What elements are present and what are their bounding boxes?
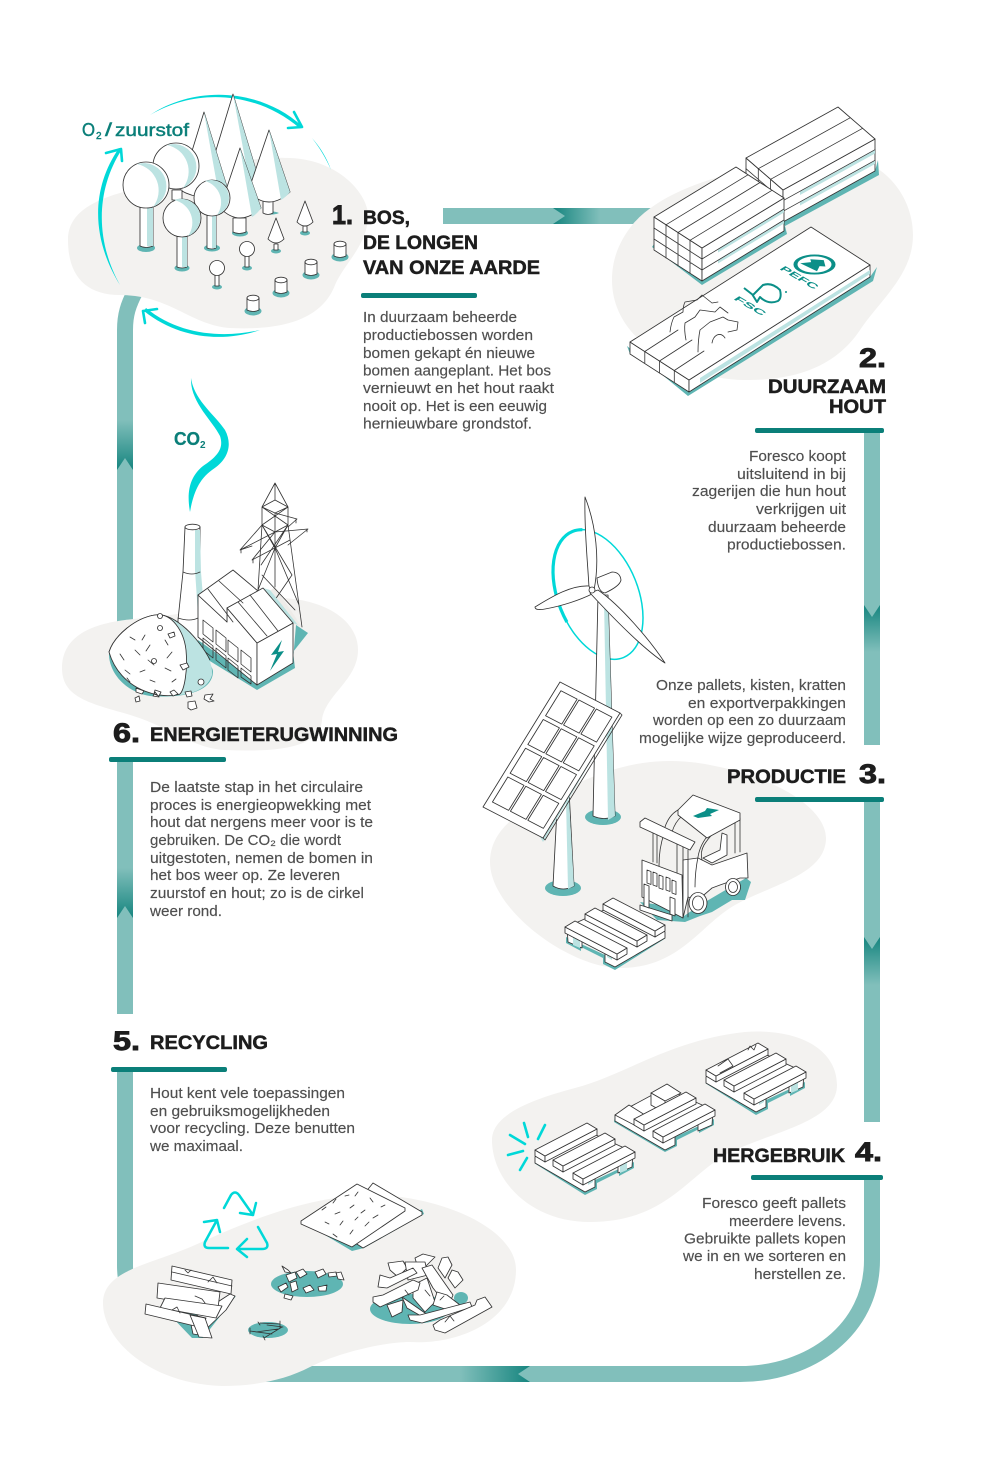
icon: new pallet (534, 1123, 635, 1195)
text: step 2 (692, 449, 846, 554)
icon: woodchip pile (109, 614, 214, 710)
heading: step 6: ENERGIETERUGWINNING (150, 724, 398, 746)
text: step 2: uitsluitend in bij (737, 467, 846, 483)
text: step 3: en exportverpakkingen (688, 696, 846, 712)
icon: saw blade edges (670, 295, 738, 352)
text: step 2: duurzaam beheerde (708, 520, 846, 536)
text: step 1 (363, 310, 554, 432)
panel: step 2 sustainable wood (612, 107, 913, 396)
label: oxygen: zuurstof (115, 120, 189, 140)
heading: step 2: 2. (859, 343, 886, 373)
icon: sparkle (508, 1123, 545, 1170)
icon: repaired pallet (614, 1084, 715, 1152)
divider: step 1 (361, 293, 477, 298)
label: oxygen: / (105, 120, 112, 140)
heading: step 1: 1. (332, 200, 353, 230)
icon: nails (248, 1321, 288, 1340)
text: step 5 (149, 1086, 355, 1155)
heading: step 4: HERGEBRUIK (713, 1145, 845, 1167)
text: step 6: weer rond. (149, 904, 222, 920)
icon: front timber stack (652, 167, 787, 285)
heading: step 5: 5. (113, 1026, 140, 1056)
text: step 1: In duurzaam beheerde (363, 310, 517, 326)
icon: factory with lightning (198, 570, 308, 690)
text: step 4: meerdere levens. (729, 1214, 846, 1230)
arrow: flow up, lower left track (117, 868, 133, 918)
text: step 6 (149, 780, 373, 920)
text: step 1: nooit op. Het is een eeuwig (363, 399, 547, 415)
text: step 4: herstellen ze. (754, 1267, 846, 1283)
icon: forklift (640, 795, 751, 922)
divider: step 6 (109, 757, 226, 762)
heading: step 1: DE LONGEN (363, 232, 478, 254)
label: oxygen (82, 120, 189, 142)
icon: wind turbine rear (545, 790, 581, 896)
heading: step 1: BOS, (363, 207, 410, 229)
heading: step 4 (713, 1137, 882, 1167)
text: step 5: we maximaal. (149, 1139, 243, 1155)
text: step 6: proces is energieopwekking met (150, 798, 371, 814)
text: step 3: mogelijke wijze geproduceerd. (639, 731, 846, 747)
heading: step 4: 4. (855, 1137, 882, 1167)
text: step 1: bomen gekapt én nieuwe (363, 346, 535, 362)
text: step 4 (682, 1196, 846, 1283)
arrow: flow up, left track (117, 420, 133, 470)
icon: PEFC logo (788, 252, 841, 277)
icon: FSC registered dot (785, 291, 787, 293)
heading: step 5: RECYCLING (150, 1032, 268, 1054)
icon: tree stumps (244, 241, 348, 316)
text: step 6: hout dat nergens meer voor is te (150, 815, 373, 831)
heading: step 1 (332, 200, 540, 279)
text: step 3: Onze pallets, kisten, kratten (656, 678, 846, 694)
text: step 4: Gebruikte pallets kopen (684, 1232, 846, 1248)
text: step 6: gebruiken. De CO₂ die wordt (150, 833, 341, 849)
arrow: flow right, top track (553, 208, 600, 224)
panel: step 3 production (483, 497, 826, 970)
icon: CO2 smoke (189, 378, 229, 512)
text: step 6: het bos weer op. Ze leveren (150, 868, 340, 884)
icon: wood scrap pile (370, 1254, 492, 1333)
heading: step 5 (113, 1026, 268, 1056)
text: step 1: productiebossen worden (363, 328, 533, 344)
text: step 4: Foresco geeft pallets (702, 1196, 846, 1212)
panel: step 5 recycling (103, 1183, 516, 1386)
panel: step 6 energy recovery (62, 378, 358, 751)
heading: step 2 (768, 343, 886, 418)
panel: step 1 forest (68, 94, 368, 337)
icon: solar panel (483, 682, 622, 842)
text: step 6: zuurstof en hout; zo is de cirkel (150, 886, 364, 902)
text: step 3: worden op een zo duurzaam (652, 713, 846, 729)
text: step 1: bomen aangeplant. Het bos (363, 364, 551, 380)
icon: particle boards (301, 1183, 424, 1251)
heading: step 6: 6. (113, 718, 140, 748)
text: step 2: productiebossen. (727, 538, 846, 554)
text: step 6: uitgestoten, nemen de bomen in (150, 851, 373, 867)
icon: wood chips (271, 1266, 344, 1300)
text: step 3 (639, 678, 846, 747)
text: step 5: en gebruiksmogelijkheden (150, 1104, 330, 1120)
heading: step 2: DUURZAAM (768, 376, 886, 398)
arrow: flow down, lower right track (864, 937, 880, 985)
icon: FSC logo (744, 284, 781, 302)
panel: step 4 reuse (492, 1032, 837, 1222)
flow track (117, 208, 880, 1382)
divider: step 2 (755, 428, 884, 433)
label: CO2: 2 (200, 440, 206, 451)
label: oxygen: 2 (96, 131, 102, 142)
heading: step 1: VAN ONZE AARDE (363, 257, 540, 279)
icon: used pallet (705, 1043, 806, 1115)
arrow: flow down, right track (864, 605, 880, 652)
label: FSC: FSC (731, 295, 769, 317)
heading: step 3: 3. (859, 759, 886, 789)
divider: step 3 (755, 797, 884, 802)
icon: trees (123, 94, 313, 290)
divider: step 4 (751, 1175, 883, 1180)
text: step 2: zagerijen die hun hout (692, 484, 846, 500)
divider: step 5 (111, 1067, 227, 1072)
icon: wind turbine front (535, 497, 665, 825)
heading: step 2: HOUT (829, 396, 886, 418)
icon: power pylon (240, 483, 308, 627)
icon: chimney (178, 524, 204, 650)
text: step 4: we in en we sorteren en (682, 1249, 846, 1265)
label: PEFC: PEFC (777, 265, 821, 291)
icon: recycling arrows (204, 1192, 267, 1257)
text: step 6: De laatste stap in het circulaire (150, 780, 363, 796)
heading: step 3: PRODUCTIE (727, 766, 846, 788)
text: step 5: Hout kent vele toepassingen (150, 1086, 345, 1102)
icon: back timber stack (744, 107, 879, 226)
text: step 5: voor recycling. Deze benutten (150, 1121, 355, 1137)
text: step 2: verkrijgen uit (756, 502, 846, 518)
heading: step 3 (727, 759, 886, 789)
text: step 1: vernieuwt en het hout raakt (363, 381, 554, 397)
label: oxygen: O (82, 120, 95, 140)
text: step 1: hernieuwbare grondstof. (363, 416, 532, 432)
label: CO2: CO (174, 428, 200, 449)
oxygen cycle arrows (98, 95, 331, 337)
text: step 2: Foresco koopt (749, 449, 846, 465)
icon: pallet under forklift (565, 898, 666, 970)
icon: broken pallet (145, 1266, 236, 1338)
icon: sawn planks with certification logos (627, 227, 877, 396)
arrow: flow left, bottom track (460, 1366, 530, 1382)
heading: step 6 (113, 718, 398, 748)
